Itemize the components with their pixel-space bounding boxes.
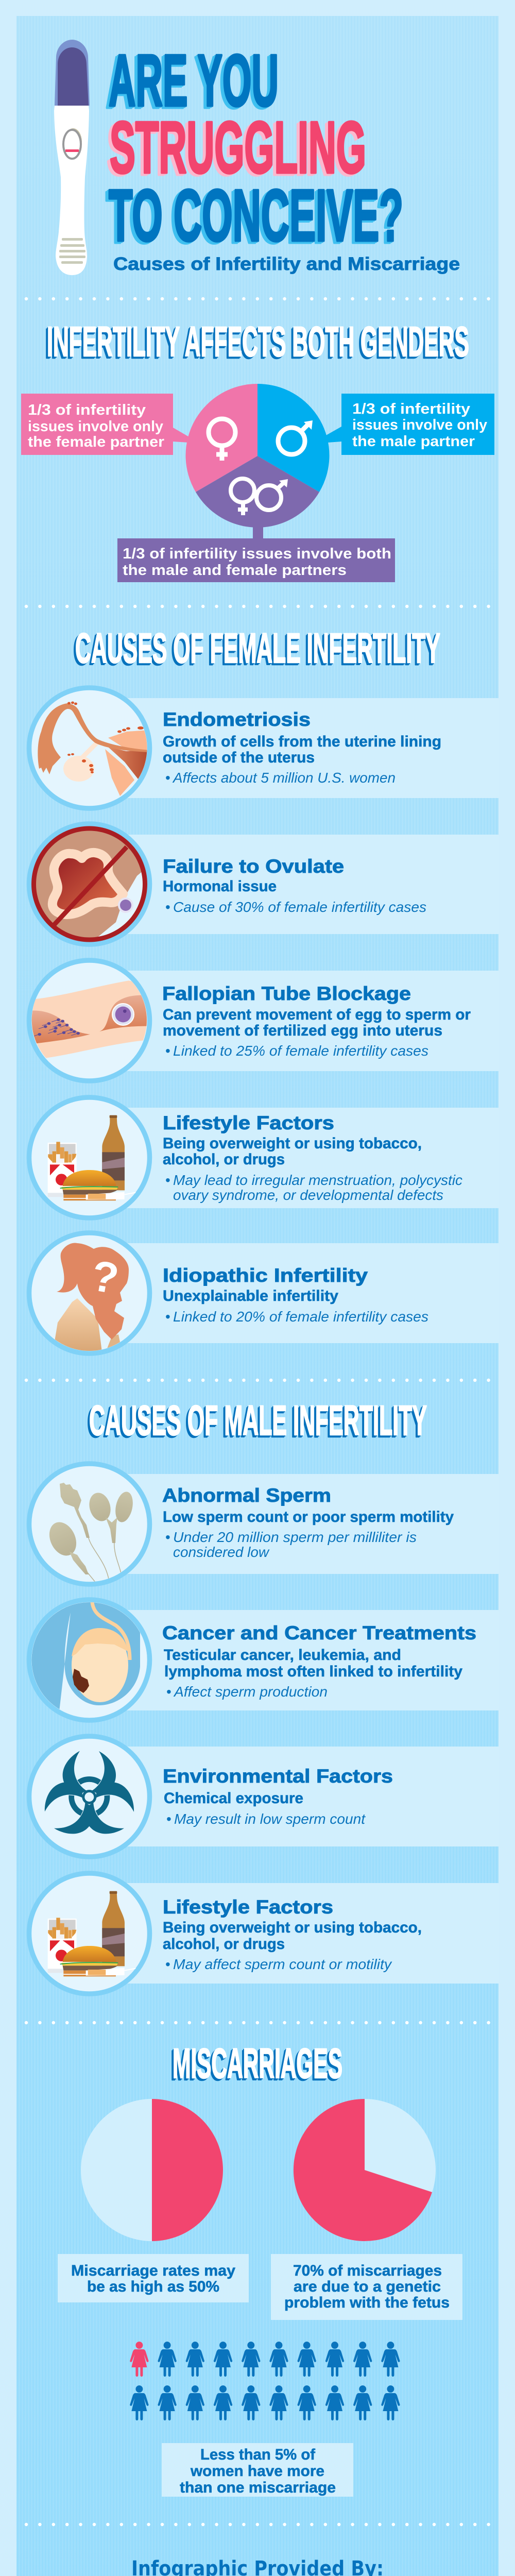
callout: male partner: the male partner [352, 433, 475, 450]
panel: endometriosis [29, 688, 499, 808]
text [162, 983, 471, 1059]
callout: male partner: issues involve only [352, 417, 487, 433]
text: Failure to Ovulate [163, 856, 344, 877]
text: Can prevent movement of egg to sperm or [163, 1006, 471, 1023]
icon: testicle with tumor [32, 1602, 147, 1718]
icon: blocked tube [31, 980, 149, 1058]
icon: ovary with prohibition sign [32, 826, 149, 945]
icon: pregnancy test stick [54, 40, 90, 275]
callout: less than 5 percent: women have more [190, 2463, 324, 2480]
callout: less than 5 percent: Less than 5% of [200, 2446, 316, 2463]
pie chart: 50 percent [81, 2099, 223, 2241]
text: • [165, 770, 170, 786]
text: Cancer and Cancer Treatments [162, 1622, 476, 1643]
text: Chemical exposure [164, 1790, 303, 1807]
pie chart: 70 percent [294, 2099, 436, 2241]
text: Linked to 25% of female infertility cases [173, 1043, 428, 1059]
text: • [165, 1529, 170, 1545]
text: • [165, 1309, 170, 1325]
callout: genetic problem: 70% of miscarriages [293, 2262, 442, 2279]
text: Lifestyle Factors [163, 1112, 334, 1133]
text: Lifestyle Factors [163, 1896, 333, 1918]
text: • [166, 1684, 171, 1700]
text: Affects about 5 million U.S. women [172, 770, 396, 786]
icon: cigarettes, bottle and burger [48, 1891, 135, 1976]
text: Cause of 30% of female infertility cases [173, 899, 426, 915]
callout: both partners: the male and female partners [123, 562, 347, 579]
title: ARE YOU [109, 40, 279, 122]
panel: failure to ovulate [29, 824, 499, 945]
text [162, 1485, 454, 1560]
panel: environmental factors [29, 1736, 499, 1857]
panel: abnormal sperm [29, 1464, 499, 1584]
callout: female partner [21, 394, 189, 455]
text: Unexplainable infertility [163, 1287, 338, 1304]
panel: fallopian tube blockage [29, 960, 499, 1081]
callout: female partner: 1/3 of infertility [28, 402, 146, 418]
text [163, 1112, 462, 1203]
text: • [166, 1811, 171, 1827]
pie slices [185, 384, 330, 528]
text: Being overweight or using tobacco, [163, 1919, 422, 1936]
text [163, 1766, 393, 1827]
text: Fallopian Tube Blockage [162, 983, 411, 1004]
icon: female and male symbols [231, 479, 288, 515]
pictogram: one in twenty women [130, 2342, 400, 2420]
callout: both partners [117, 524, 395, 582]
icon: woman with question mark [55, 1243, 129, 1351]
icon: abnormal sperm cells [44, 1483, 135, 1583]
text: Under 20 million sperm per milliliter is [173, 1529, 417, 1545]
icon: woman with question mark: ? [88, 1251, 122, 1303]
text: Testicular cancer, leukemia, and [164, 1647, 401, 1664]
text: May lead to irregular menstruation, polycystic [173, 1172, 462, 1188]
callout: male partner [326, 394, 494, 455]
text: Affect sperm production [173, 1684, 328, 1700]
text: • [165, 1043, 170, 1059]
callout: genetic problem [271, 2254, 462, 2320]
icon: female symbol [209, 419, 235, 461]
text [162, 1622, 476, 1700]
icon: male symbol [278, 420, 313, 454]
text: considered low [173, 1544, 270, 1560]
text: Growth of cells from the uterine lining [163, 733, 441, 750]
text: Linked to 20% of female infertility cases [173, 1309, 428, 1325]
panel: lifestyle factors (male) [29, 1873, 499, 1994]
text: ovary syndrome, or developmental defects [173, 1187, 443, 1203]
text: Environmental Factors [163, 1766, 393, 1787]
text: Idiopathic Infertility [163, 1265, 368, 1286]
text: Hormonal issue [163, 878, 277, 895]
text: • [165, 1956, 170, 1972]
callout: female partner: the female partner [28, 434, 164, 450]
gender pie chart with callouts [21, 384, 494, 582]
subtitle: Causes of Infertility and Miscarriage [113, 254, 460, 274]
icon: uterus and tube [38, 702, 149, 796]
panel: cancer and cancer treatments [29, 1600, 499, 1731]
callout: miscarriage rates: Miscarriage rates may [71, 2262, 235, 2279]
icon: biohazard symbol [40, 1748, 139, 1836]
text: alcohol, or drugs [163, 1936, 285, 1953]
text: movement of fertilized egg into uterus [163, 1022, 442, 1039]
text: Being overweight or using tobacco, [163, 1135, 422, 1152]
text [163, 1896, 422, 1972]
text: May affect sperm count or motility [173, 1956, 392, 1972]
panel: idiopathic infertility [29, 1233, 499, 1360]
callout: miscarriage rates: be as high as 50% [87, 2278, 219, 2295]
text: alcohol, or drugs [163, 1151, 285, 1168]
text: Endometriosis [163, 709, 311, 730]
heading: miscarriages: MISCARRIAGES [173, 2040, 342, 2087]
text: Low sperm count or poor sperm motility [163, 1509, 454, 1526]
panel: lifestyle factors (female) [29, 1097, 499, 1218]
callout: both partners: 1/3 of infertility issues involve both [123, 546, 391, 562]
text [163, 1265, 428, 1325]
callout: genetic problem: problem with the fetus [284, 2294, 450, 2311]
title [109, 40, 403, 257]
callout: female partner: issues involve only [28, 418, 163, 435]
text: lymphoma most often linked to infertility [164, 1663, 462, 1680]
icon: cigarettes, bottle and burger [48, 1115, 135, 1200]
text [163, 709, 441, 786]
text: May result in low sperm count [174, 1811, 366, 1827]
callout: genetic problem: are due to a genetic [294, 2278, 441, 2295]
callout: less than 5 percent: than one miscarriage [180, 2479, 336, 2496]
text: • [165, 1172, 170, 1188]
text [163, 856, 426, 915]
text: Abnormal Sperm [162, 1485, 331, 1506]
callout: less than 5 percent [162, 2443, 353, 2497]
callout: male partner: 1/3 of infertility [352, 401, 470, 417]
text: outside of the uterus [163, 749, 315, 766]
text: • [165, 899, 170, 915]
callout: miscarriage rates [58, 2254, 249, 2302]
